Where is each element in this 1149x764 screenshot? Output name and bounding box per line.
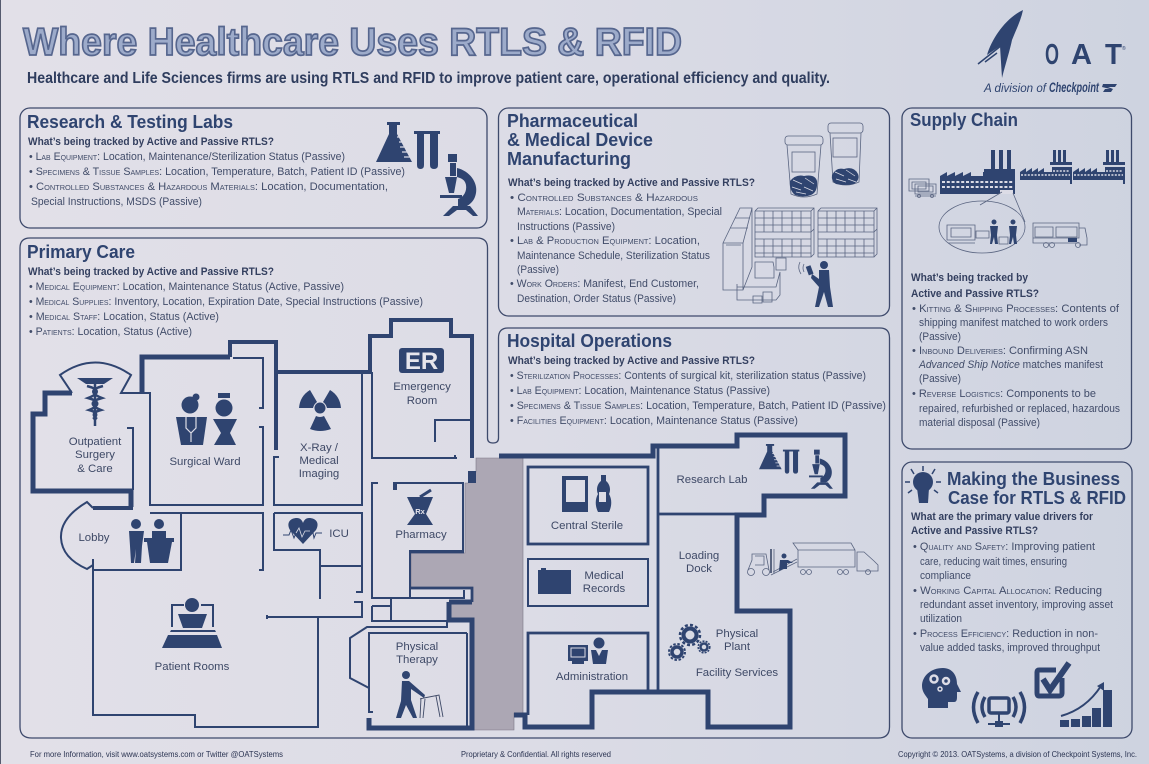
label: Surgery [75,449,115,461]
logo: OAT: ® [1122,45,1126,52]
list: supply chain: • Inbound Deliveries: Confirming ASN [912,345,1088,357]
question: business case [911,511,1094,537]
icon: growth chart [1060,682,1112,727]
room: X-Ray / Medical Imaging [299,390,341,480]
icon: surgeon and nurse [176,393,237,445]
panel: Primary Care and Hospital Operations outline [20,238,890,738]
label: Surgical Ward [169,456,241,468]
heading: hospital operations: Hospital Operations [507,330,672,351]
label: physical plant [716,628,758,653]
icon: flask and test tubes [376,122,440,169]
list: research: Special Instructions, MSDS (Passive) [31,196,202,208]
subtitle: Healthcare and Life Sciences firms are using RTLS and RFID to improve patient care, operational efficiency and quality. [27,70,830,87]
text: Hospital Operations [507,330,886,427]
heading: business case: Case for RTLS & RFID [948,487,1126,508]
label: Imaging [299,468,339,480]
icon: pill jars [785,123,863,197]
label [583,570,626,595]
heading: research: Research & Testing Labs [27,111,233,132]
icon: forklift and truck [748,543,878,576]
icon: microscope [809,450,833,489]
panel: Pharmaceutical & Medical Device Manufacturing [498,108,890,316]
panel: Making the Business Case [902,462,1132,738]
label: Research Lab [677,474,747,486]
icon: heart monitor [283,518,322,544]
heading: pharmaceutical [507,110,653,169]
floor plan: corridor [411,458,523,730]
icon: radiation [299,390,341,431]
icon: worker with scanner [799,261,833,307]
list: pharmaceutical [510,192,722,305]
icon: loading detail [939,192,1025,253]
question: business case: What are the primary value drivers for [911,511,1094,523]
label: Medical [584,570,624,582]
icon: mortar and pestle: Rx [415,507,426,516]
list: hospital operations: • Sterilization Processes: Contents of surgical kit, sterilization status (Passive) [510,370,866,382]
list: primary care: • Patients: Location, Status (Active) [29,326,192,338]
text: Primary Care [27,241,423,338]
room: Loading Dock [679,543,878,576]
list: pharmaceutical: (Passive) [517,264,559,276]
list: business case: • Working Capital Allocation: Reducing [913,585,1102,597]
footer: For more Information, visit www.oatsystems.com or Twitter @OATSystems [30,749,283,759]
icon: ER sign: ER [405,348,438,375]
logo: OAT: A division of [983,83,1048,95]
question: supply chain: What’s being tracked by [911,272,1029,284]
list: supply chain: • Kitting & Shipping Processes: Contents of [912,303,1119,315]
question: primary care: What’s being tracked by Active and Passive RTLS? [28,266,274,278]
room: Physical Therapy [396,641,443,718]
panel: Research & Testing Labs [20,108,487,228]
room: ICU [283,518,349,544]
label: Physical [396,641,438,653]
question: research: What’s being tracked by Active and Passive RTLS? [28,136,274,148]
label: Records [583,583,626,595]
footer: Proprietary & Confidential. All rights reserved [461,749,611,759]
icon: receptionist and visitor [129,519,174,563]
list: business case: redundant asset inventory, improving asset [920,599,1113,611]
icon: microscope [440,154,478,216]
heading: pharmaceutical: Pharmaceutical [507,110,638,131]
room: Emergency Room [393,348,451,407]
label [679,550,719,575]
list: hospital operations: • Lab Equipment: Location, Maintenance Status (Passive) [510,385,770,397]
panel: Supply Chain [902,108,1132,449]
logo: OAT: Checkpoint [1049,80,1099,95]
list: pharmaceutical: Instructions (Passive) [517,221,615,233]
list: supply chain: (Passive) [919,331,961,343]
title: Where Healthcare Uses RTLS & RFID [23,21,682,64]
floor plan: hospital walls [33,320,845,728]
list: business case: utilization [920,613,962,625]
label [396,641,438,666]
logo: OAT: O [1045,39,1059,71]
list: primary care: • Medical Supplies: Inventory, Location, Expiration Date, Special Instructions (Passive) [29,296,423,308]
left wing walls [33,393,131,507]
label: Outpatient [69,436,122,448]
label: Emergency [393,381,451,393]
icon: caduceus [77,378,113,426]
right wing walls [499,435,845,727]
room: Physical Plant and Facility Services [669,625,778,679]
label [393,381,451,407]
icon: sterilizer and bottle [562,475,611,512]
list: pharmaceutical: • Lab & Production Equipment: Location, [510,235,700,247]
list: hospital operations: • Facilities Equipment: Location, Maintenance Status (Passive) [510,415,798,427]
label: facility services: Facility Services [696,667,778,679]
label: ICU [329,528,349,540]
list: pharmaceutical: • Work Orders: Manifest, End Customer, [510,278,699,290]
icon: gears [669,625,710,660]
room: Surgical Ward [169,393,241,468]
heading: business case [947,468,1126,508]
room: Central Sterile [551,475,623,532]
label: Administration [556,671,628,683]
label: physical plant: Plant [724,641,751,653]
question: business case: Active and Passive RTLS? [911,525,1038,537]
logo: OAT: A [1071,39,1092,71]
heading: pharmaceutical: Manufacturing [507,148,631,169]
list: business case: value added tasks, improved throughput [920,642,1100,654]
footer [30,749,1137,759]
icon: patient in bed [162,598,222,648]
list: business case: • Process Efficiency: Reduction in non- [913,628,1098,640]
logo: OAT: T [1105,39,1122,71]
label [299,442,339,480]
list: business case: compliance [920,570,971,582]
list: primary care: • Medical Equipment: Location, Maintenance Status (Active, Passive) [29,281,344,293]
question: pharmaceutical: What’s being tracked by Active and Passive RTLS? [508,177,755,189]
icon: folder [538,568,571,594]
room: Medical Records [538,568,626,595]
list: business case: • Quality and Safety: Improving patient [913,541,1095,553]
heading: business case: Making the Business [947,468,1120,489]
icon: person with walker [396,671,443,718]
list: supply chain: shipping manifest matched to work orders [919,317,1108,329]
room: Patient Rooms [155,598,230,673]
question: hospital operations: What’s being tracked by Active and Passive RTLS? [508,355,755,367]
list: primary care [29,281,423,338]
list: pharmaceutical: Maintenance Schedule, Sterilization Status [517,250,710,262]
list: supply chain: material disposal (Passive) [919,417,1040,429]
list: research: • Controlled Substances & Hazardous Materials: Location, Documentation, [29,181,388,193]
label: Central Sterile [551,520,623,532]
label: Pharmacy [395,529,447,541]
label: Medical [299,455,339,467]
room: Pharmacy [395,490,447,541]
list: supply chain [912,303,1120,429]
list: hospital operations [510,370,886,427]
label: & Care [77,463,113,475]
icon: trailers [909,179,936,198]
heading: pharmaceutical: & Medical Device [507,129,653,150]
room: Lobby [78,519,174,563]
question: supply chain: Active and Passive RTLS? [911,288,1039,300]
icon: flask and tubes [759,444,799,474]
label: Therapy [396,654,438,666]
heading: supply chain: Supply Chain [910,109,1018,130]
room: Research Lab [677,444,833,489]
list: pharmaceutical: Destination, Order Status (Passive) [517,293,676,305]
label: Patient Rooms [155,661,230,673]
list: supply chain: repaired, refurbished or replaced, hazardous [919,403,1120,415]
heading: primary care: Primary Care [27,241,135,262]
logo: OAT [978,10,1126,95]
icon: computer and person [568,638,608,664]
question: supply chain [911,272,1039,300]
label: X-Ray / [300,442,339,454]
icon: wireless computer [974,692,1024,727]
list: supply chain: • Reverse Logistics: Components to be [912,388,1096,400]
room: Administration [556,638,628,683]
icon: delivery truck [1033,223,1087,248]
list: hospital operations: • Specimens & Tissue Samples: Location, Temperature, Batch, Patient ID (Passive) [510,400,886,412]
icon: checkbox [1037,663,1069,696]
list: supply chain: Advanced Ship Notice matches manifest [918,359,1103,371]
list: business case: care, reducing wait times, ensuring [920,556,1067,568]
label: Loading [679,550,719,562]
list: pharmaceutical: • Controlled Substances & Hazardous [510,192,698,204]
list: pharmaceutical: Materials: Location, Documentation, Special [517,206,722,218]
list: research [29,151,405,208]
list: research: • Lab Equipment: Location, Maintenance/Sterilization Status (Passive) [29,151,345,163]
icon: light bulb [905,466,941,503]
icon: factories [940,150,1125,194]
label [69,436,122,475]
label: Room [407,395,437,407]
icon: warehouse shelves [723,208,877,303]
list: business case [913,541,1113,654]
list: research: • Specimens & Tissue Samples: Location, Temperature, Batch, Patient ID (Passive) [29,166,405,178]
icon: head with gears [922,668,961,708]
list: supply chain: (Passive) [919,373,961,385]
label: Lobby [78,532,110,544]
list: primary care: • Medical Staff: Location, Status (Active) [29,311,219,323]
room: Outpatient Surgery & Care [69,378,122,475]
label: physical plant: Physical [716,628,758,640]
label: Dock [686,563,712,575]
